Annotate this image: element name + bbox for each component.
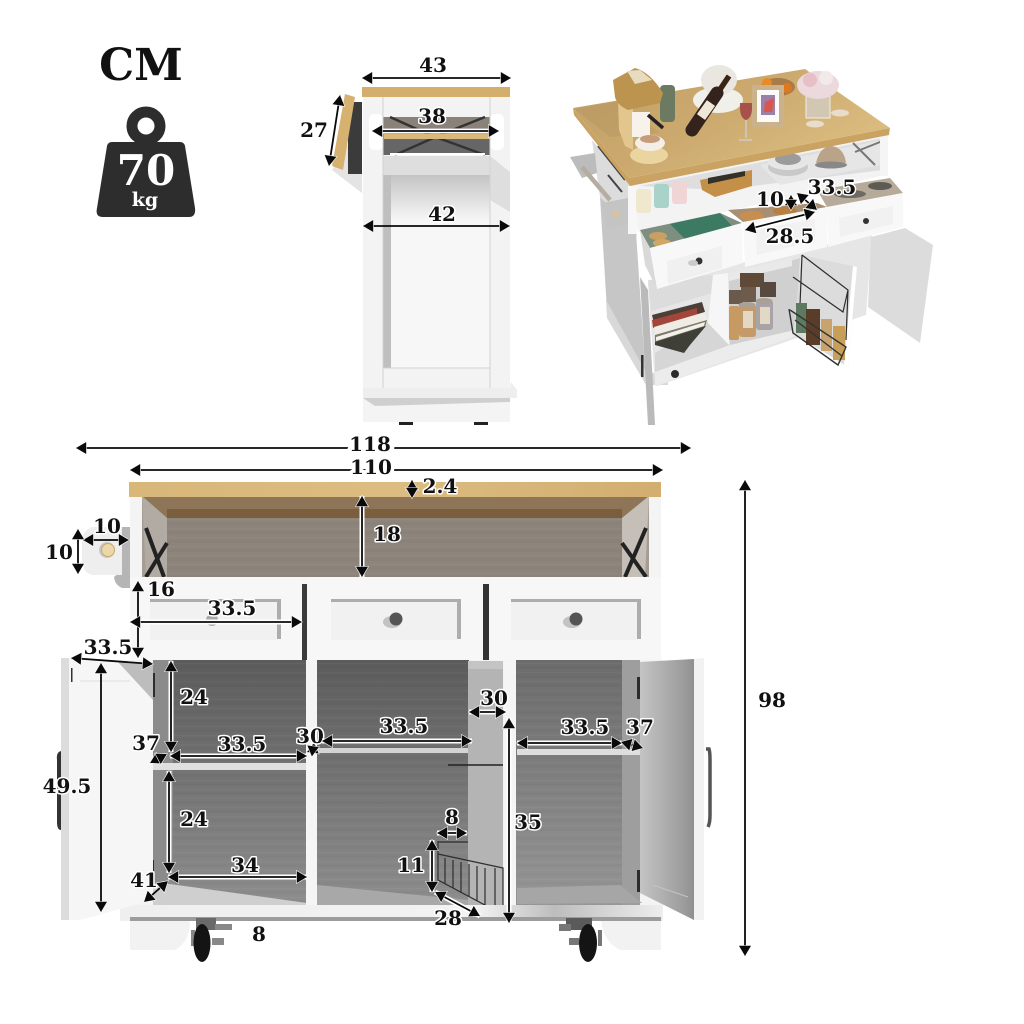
dimension: 28: 28: [434, 906, 462, 930]
left drawer: [130, 577, 307, 660]
books: [652, 302, 707, 353]
legs: [130, 921, 661, 950]
panel: perspective photo of the island: [570, 65, 933, 425]
dimension: 16: 16: [147, 577, 175, 601]
dimension: 27: [300, 95, 340, 166]
dimension: 41: [130, 868, 168, 902]
base rail: [120, 905, 663, 921]
towel bracket: [82, 527, 130, 588]
wine glass: [739, 103, 752, 140]
dimension: 33.5 perspective: [797, 175, 856, 210]
left door open: [61, 658, 153, 920]
side view table top: [362, 87, 510, 97]
dimension: 33.5 perspective: 33.5: [808, 175, 856, 199]
left door handle: [57, 751, 61, 830]
right door open: [640, 658, 704, 920]
towel bar bracket: [570, 153, 630, 228]
dimension: 11: [397, 840, 432, 892]
side view body: [363, 97, 510, 388]
dimension: 43: 43: [419, 53, 447, 77]
dimension: 38: 38: [418, 104, 446, 128]
dimension: 110: 110: [350, 455, 392, 479]
dimension: 10 horizontal: 10: [93, 514, 121, 538]
dimension: 18: 18: [373, 522, 401, 546]
flowers in vase: [797, 71, 849, 128]
left bay: [152, 660, 307, 906]
upper left side panel: [592, 140, 637, 236]
dimension: 34: 34: [231, 853, 259, 877]
center door with rack: [789, 255, 857, 367]
dimension: 49.5: 49.5: [43, 774, 91, 798]
dimension: 37 right: 37: [626, 715, 654, 739]
title: CM unit: CM: [99, 40, 183, 91]
dimension: 38: [372, 104, 499, 131]
table top: [573, 69, 890, 186]
left door edge: [640, 277, 655, 425]
dimension: 8 wheel: 8: [252, 922, 266, 946]
side view recessed panel: [383, 97, 490, 388]
dimension: 27: 27: [300, 118, 328, 142]
dimension: 33.5 door: 33.5: [84, 635, 132, 659]
open upper shelf: [130, 496, 661, 578]
dimension: 24 lower: [169, 771, 208, 873]
left side panel: [600, 197, 646, 382]
coffee machine: [613, 68, 675, 164]
dimension: 28.5 perspective: 28.5: [766, 224, 814, 248]
dimension: 28: [434, 892, 480, 930]
drawer right: [817, 178, 903, 247]
dimension: 24 upper: 24: [180, 685, 208, 709]
drawer left: [640, 213, 743, 289]
panel: side view of the island: [332, 87, 517, 425]
dimension: 33.5 left shelf: 33.5: [218, 732, 266, 756]
dimension: 8 rack: [437, 805, 467, 833]
left caster: [191, 918, 232, 962]
icon: weight 70 kg: kg: [132, 189, 158, 211]
bowl of fruit: [761, 78, 795, 96]
dimension: 33.5 middle shelf: 33.5: [380, 714, 428, 738]
side view opening: [369, 114, 504, 156]
dimension: 37 left: [132, 731, 167, 763]
dimension: 10 vertical: [45, 529, 78, 574]
side view shadow: [383, 156, 510, 212]
middle drawer: [310, 577, 489, 660]
dimension: 11: 11: [397, 853, 425, 877]
center post: [306, 660, 317, 906]
table top: [129, 482, 661, 497]
dimension: 18: [362, 496, 401, 577]
dimension: 35: 35: [514, 810, 542, 834]
dimension: 10 perspective: 10: [756, 187, 784, 211]
dimension: 30 left: 30: [296, 724, 324, 748]
dimension: 28.5 perspective: [745, 212, 815, 248]
cabinet body: [120, 660, 663, 912]
dimension: 42: 42: [428, 202, 456, 226]
right caster: [559, 918, 602, 962]
panel: front view of the island: [57, 482, 710, 962]
dimension: 118: 118: [349, 432, 391, 456]
picture frame: [752, 85, 784, 127]
dimension: 33.5 door: [71, 635, 153, 664]
dimension: 33.5 right shelf: 33.5: [561, 715, 609, 739]
white plates and wine bottle: [692, 65, 743, 130]
dimension: 34: [168, 853, 307, 877]
right drawer: [490, 577, 661, 660]
dimension: 41: 41: [130, 868, 158, 892]
right bay: [516, 660, 642, 905]
shelf items: [636, 146, 847, 213]
center door edge on: [448, 661, 503, 905]
side view base: [363, 382, 517, 425]
dimension: 30 door: 30: [480, 686, 508, 710]
dimension: 33.5 drawer: 33.5: [208, 596, 256, 620]
right post: [504, 660, 516, 906]
drawer row: [130, 577, 661, 661]
icon: weight 70 kg: [97, 112, 195, 217]
side view drop leaf: [332, 94, 362, 193]
jars: [729, 273, 776, 340]
drawer middle: [728, 203, 827, 267]
dimension: 24 lower: 24: [180, 807, 208, 831]
dimension: 2.4: 2.4: [423, 474, 457, 498]
middle bay: [317, 660, 469, 905]
hinges: [149, 673, 641, 892]
dimension: 24 upper: [171, 661, 208, 752]
open shelf zone: [628, 135, 888, 234]
dimension: 16: [138, 577, 175, 658]
interior of lower cabinet: [648, 235, 872, 386]
dimension: 10 horizontal: [83, 514, 129, 540]
wire rack: [438, 841, 503, 912]
dimension: 37 right: [621, 715, 654, 748]
dimension: 30 door: [469, 686, 508, 712]
dimension: 37 left: 37: [132, 731, 160, 755]
dimension: 10 vertical: 10: [45, 540, 73, 564]
dimension: 98: 98: [758, 688, 786, 712]
dimension: 8 rack: 8: [445, 805, 459, 829]
right door handle: [706, 749, 710, 827]
dimension: 33.5 right shelf: [517, 715, 622, 743]
dimension: 33.5 left shelf: [170, 732, 307, 756]
right door open: [868, 228, 933, 343]
icon: weight 70 kg: 70: [117, 146, 175, 195]
